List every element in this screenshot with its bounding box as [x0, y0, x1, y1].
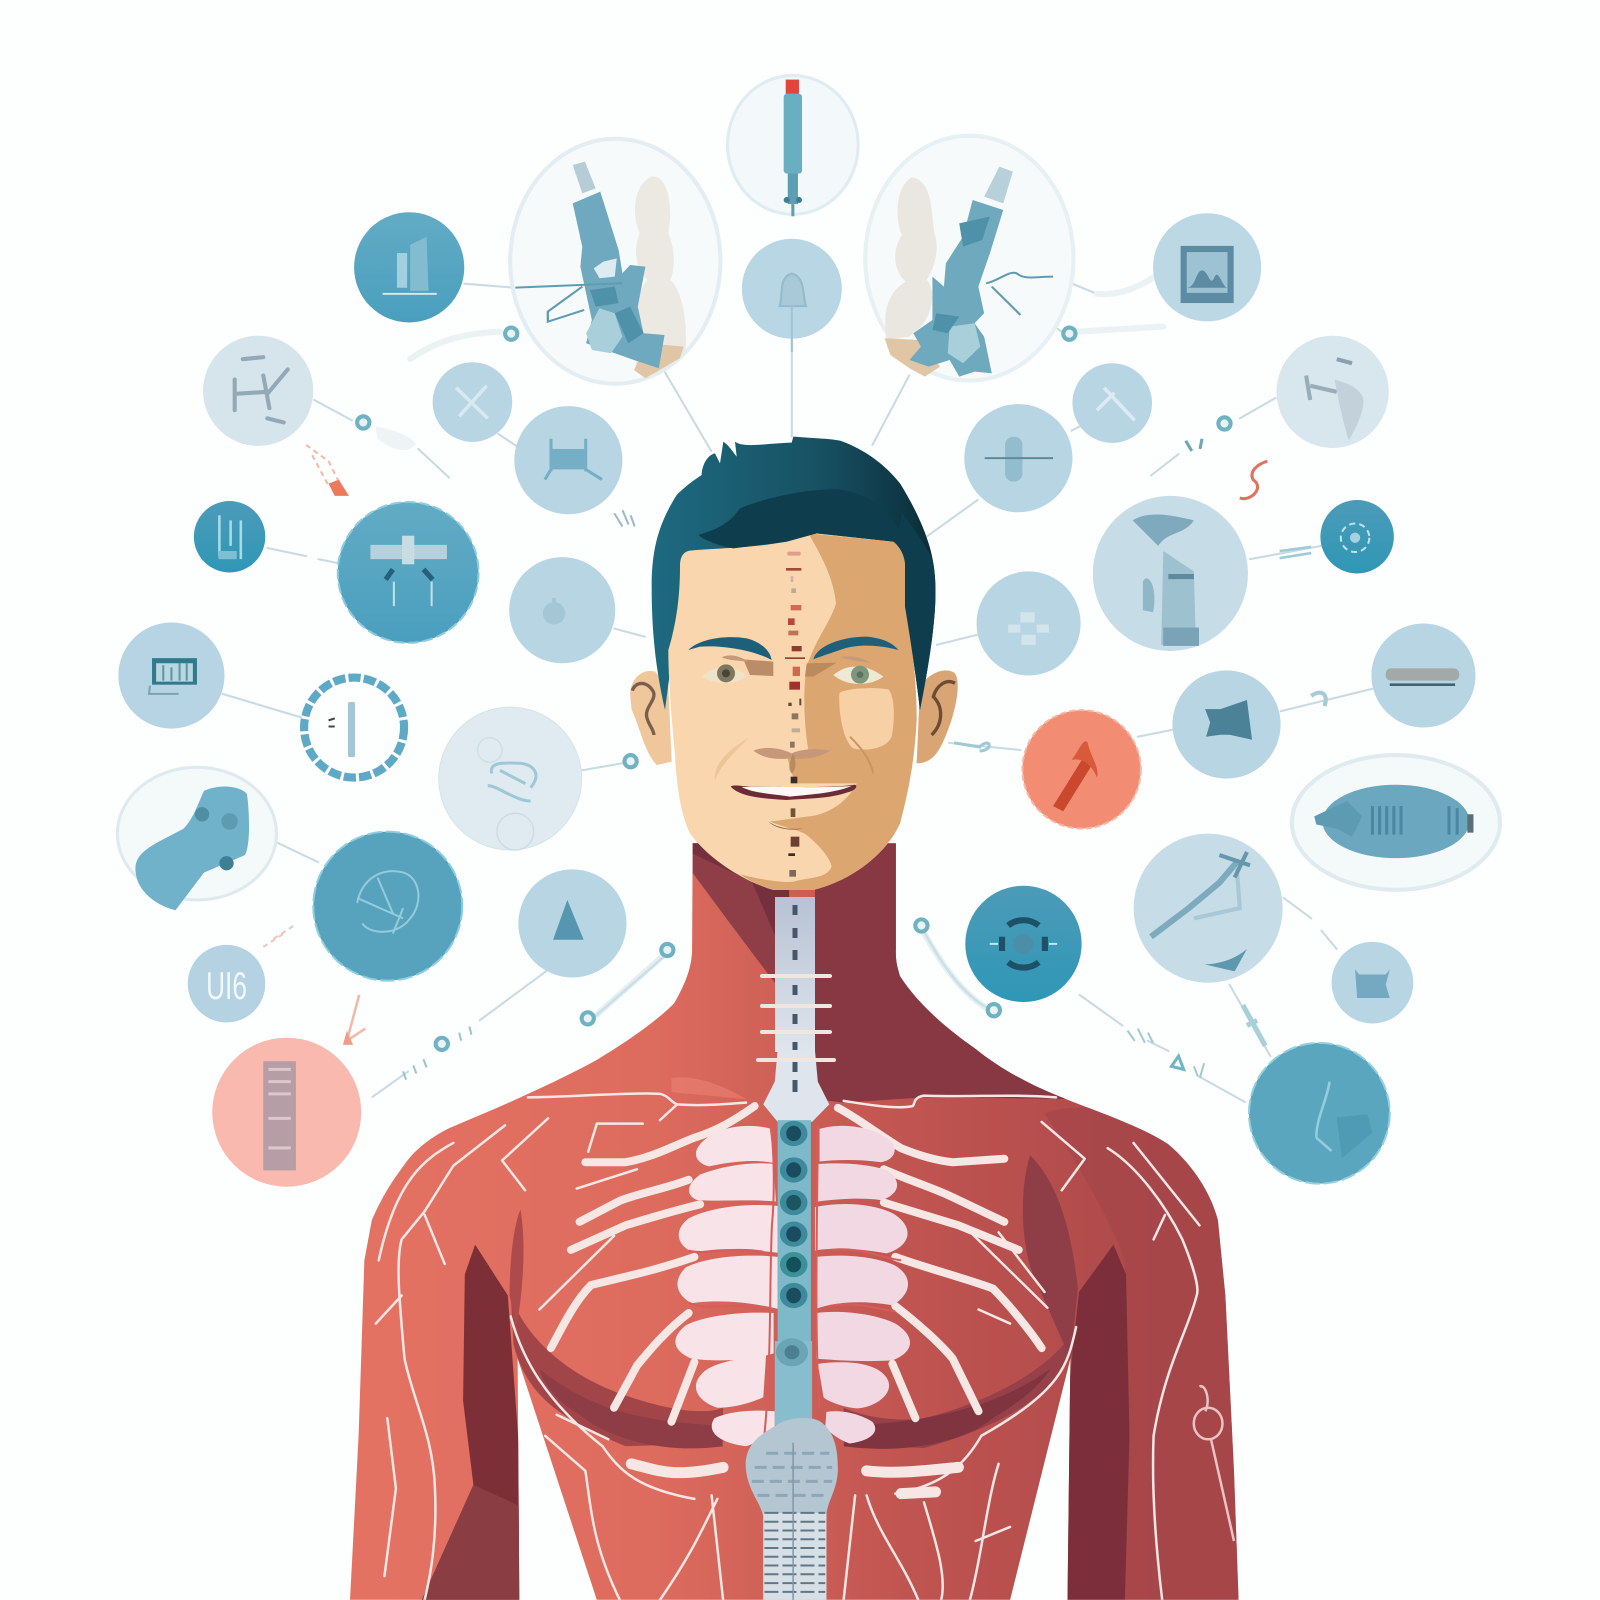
- ear left: [630, 671, 672, 765]
- icon circle: device panel: [1153, 213, 1261, 321]
- body torso: [350, 843, 1238, 1600]
- icon circle: t-bar tool: [338, 502, 479, 643]
- arm implant mark: [1194, 1386, 1234, 1541]
- icon circle: machinery: [1093, 496, 1248, 651]
- icon circle: grey pelvis: [1277, 336, 1389, 448]
- icon circle: chart screen: [118, 622, 224, 729]
- circles and icons ring: [117, 76, 1500, 1187]
- icon circle: pillars: [194, 501, 265, 572]
- shading: left arm wedge: [422, 1245, 519, 1600]
- icon circle: pink battery: [212, 1038, 361, 1187]
- icon circle: grey frame: [203, 336, 313, 446]
- icon circle: triangle: [518, 869, 627, 978]
- nose: [753, 748, 830, 759]
- shading: neck and right shoulder: [422, 843, 1240, 1600]
- body silhouette: [350, 843, 1238, 1600]
- nerves and branches: [376, 1093, 1200, 1600]
- left tooth and implant: [515, 162, 686, 378]
- icon circle: bracket: [514, 406, 622, 514]
- icon circle: clamp: [1172, 670, 1281, 779]
- eye right: [833, 666, 883, 684]
- eyebrows: [688, 637, 772, 660]
- icon circle: stapler: [1371, 623, 1475, 728]
- face skin: [668, 533, 917, 890]
- icon circle: letters: [188, 945, 265, 1022]
- eye shadows: [743, 659, 773, 676]
- icon bubble: right tooth shell: [865, 136, 1073, 381]
- center marks: [785, 552, 805, 877]
- icon circle: plus: [977, 571, 1081, 676]
- icon circle: drill frame: [1134, 834, 1283, 983]
- icon circle: small bracket: [1332, 942, 1413, 1023]
- icon circle: orange organ: [1022, 710, 1141, 829]
- hair swoop: [698, 489, 935, 710]
- icon circle: cross: [433, 362, 512, 442]
- icon circle: bar building: [354, 212, 464, 322]
- icon bubble: capsule device: [1292, 755, 1500, 890]
- icon circle: cell: [313, 832, 462, 981]
- mouth: [731, 785, 856, 800]
- smile lines: [715, 738, 748, 780]
- icon circle: vortex: [1320, 500, 1394, 573]
- icon circle: pale molecule: [439, 707, 582, 850]
- icon bubble: left tooth shell: [510, 139, 720, 384]
- neck spine: [758, 897, 834, 1092]
- icon ring: pencil: [304, 678, 404, 778]
- icon circle: capsule: [964, 404, 1072, 512]
- hair back: [652, 437, 935, 710]
- icon circle: kettle: [509, 557, 615, 663]
- connector lines and small nodes: [222, 278, 1372, 1102]
- eye left: [702, 664, 747, 683]
- icon circle: letters: UI6: [206, 965, 247, 1008]
- icon bubble: syringe top: [728, 76, 858, 216]
- icon circle: vessel: [1249, 1043, 1390, 1184]
- head: [630, 437, 958, 890]
- spine bar with vertebrae: [746, 1050, 838, 1600]
- icon circle: bell: [742, 239, 842, 352]
- cheek patch: [839, 688, 894, 750]
- face shaded side: [740, 533, 917, 890]
- shading: chest bands: [511, 1295, 723, 1446]
- icon circle: pale cross: [1072, 363, 1152, 443]
- chin shadow: [768, 822, 803, 830]
- icon bubble: blue block: [117, 767, 277, 910]
- ear right: [917, 670, 958, 763]
- right tooth and implant: [885, 167, 1053, 377]
- lungs: [675, 1120, 910, 1446]
- tooth implant details: [515, 162, 1053, 378]
- icon circle: dark gauge: [965, 886, 1082, 1002]
- shading: right arm wedge: [1068, 1245, 1129, 1600]
